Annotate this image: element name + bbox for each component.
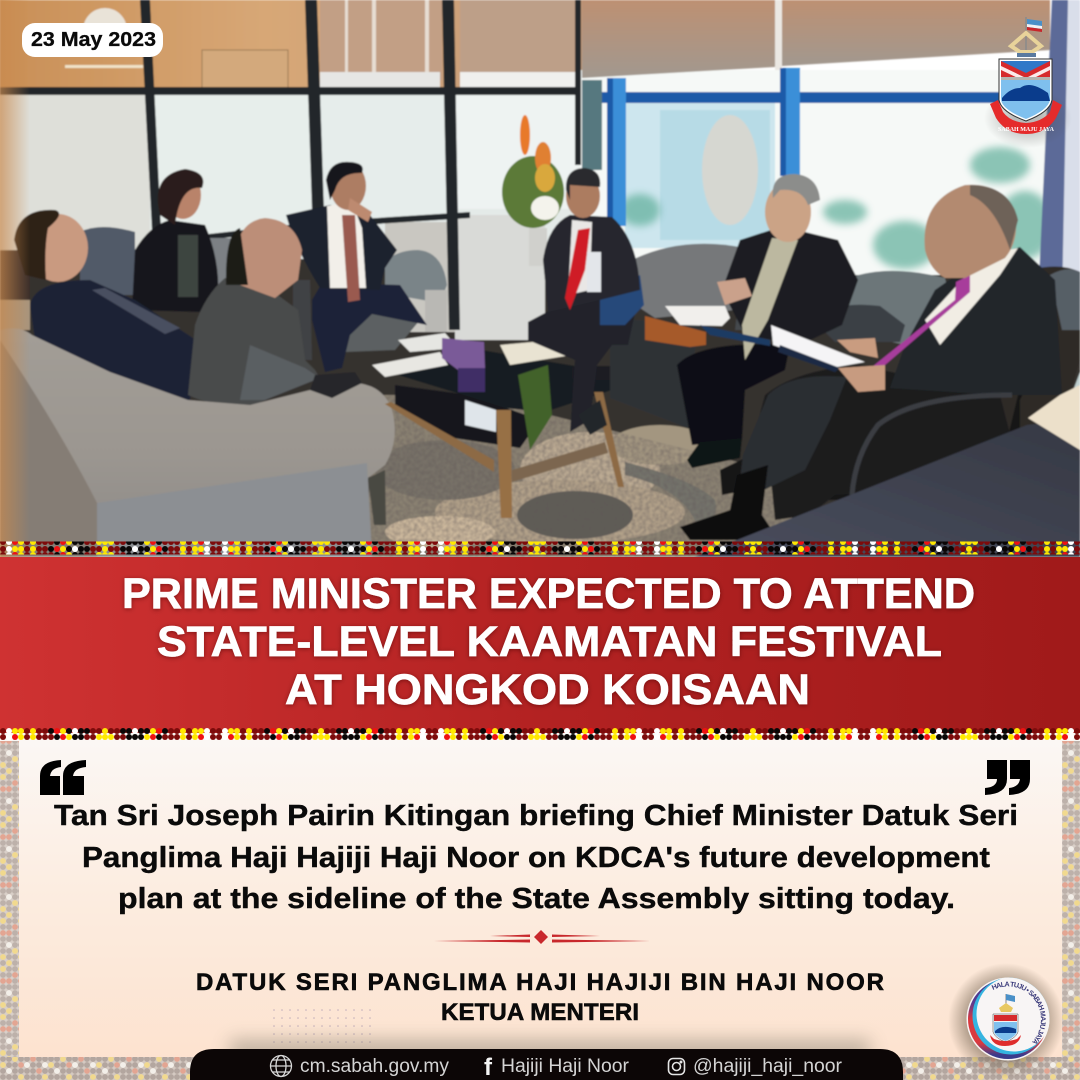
author name and title: KETUA MENTERI (441, 999, 639, 1026)
carpet (365, 395, 815, 557)
person: grey jacket front (188, 218, 320, 406)
panel: meeting photo (0, 0, 1080, 557)
woven border: bottom (0, 1057, 1080, 1080)
quote text: plan at the sideline of the State Assembly sitting today. (118, 883, 955, 915)
decorative dot grid (268, 1006, 372, 1048)
red headline band (0, 557, 1080, 733)
panel: quote area background (0, 727, 1080, 1080)
date pill: 23 May 2023 (31, 29, 156, 51)
front grey sofa (0, 328, 395, 557)
person: red tie (528, 168, 644, 435)
frosted glass panels (0, 94, 590, 340)
flower arrangement (502, 115, 564, 450)
icon: globe (270, 1056, 292, 1076)
ornament divider (434, 930, 650, 944)
person: hand on chin (286, 162, 427, 372)
title: STATE-LEVEL KAAMATAN FESTIVAL (157, 618, 942, 666)
icon: instagram (668, 1058, 684, 1074)
logo: Hala Tuju badge (950, 965, 1062, 1076)
facebook name: Hajiji Haji Noor (501, 1056, 630, 1077)
title: PRIME MINISTER EXPECTED TO ATTEND (122, 570, 975, 618)
right window view (580, 70, 1080, 275)
icon: Sabah coat of arms: SABAH MAJU JAYA (998, 127, 1055, 133)
person: woman in black (132, 169, 218, 312)
window frames (582, 0, 1080, 300)
dark glazing frames (0, 0, 581, 330)
leather chair (815, 266, 1080, 500)
instagram handle: @hajiji_haji_noor (693, 1056, 843, 1077)
left fade overlay (0, 0, 30, 557)
documents, wooden box and hands (645, 306, 885, 392)
sofa behind left (0, 227, 447, 360)
photo scene (0, 0, 1080, 557)
central tufted sofa (610, 244, 950, 428)
person: right, magenta tie (680, 185, 1062, 540)
bead strip: bottom (0, 727, 1080, 740)
mini coat of arms (990, 994, 1021, 1046)
logo: Hala Tuju badge: HALA TUJU • SABAH MAJU JAYA (992, 982, 1046, 1044)
woven border: left (0, 741, 19, 1080)
footer contact bar (190, 1049, 903, 1080)
base floor layer (0, 230, 1080, 557)
desk and papers (694, 385, 1080, 557)
author name and title (196, 969, 884, 1026)
quote text: Panglima Haji Hajiji Haji Noor on KDCA's future development (82, 842, 990, 874)
person: navy suit left (14, 210, 196, 400)
quote text (54, 800, 1018, 915)
date pill (22, 23, 163, 57)
author name and title: DATUK SERI PANGLIMA HAJI HAJIJI BIN HAJI NOOR (196, 969, 884, 996)
icon: closing quote mark (985, 760, 1030, 795)
title (122, 570, 975, 714)
footer shadow (230, 1040, 870, 1062)
roller blinds (582, 0, 1050, 78)
quote text: Tan Sri Joseph Pairin Kitingan briefing Chief Minister Datuk Seri (54, 800, 1018, 832)
person: speaking, grey hair (677, 174, 858, 495)
icon: Sabah coat of arms (984, 17, 1072, 148)
icon: opening quote mark (40, 760, 86, 795)
wall: wood panels and blinds (0, 0, 590, 92)
coffee table (372, 333, 627, 518)
bead strip: top (0, 542, 1080, 554)
title: AT HONGKOD KOISAAN (285, 666, 810, 714)
crescent rings (968, 976, 1052, 1059)
website: cm.sabah.gov.my (300, 1056, 450, 1077)
woven border: right (1062, 741, 1080, 1080)
